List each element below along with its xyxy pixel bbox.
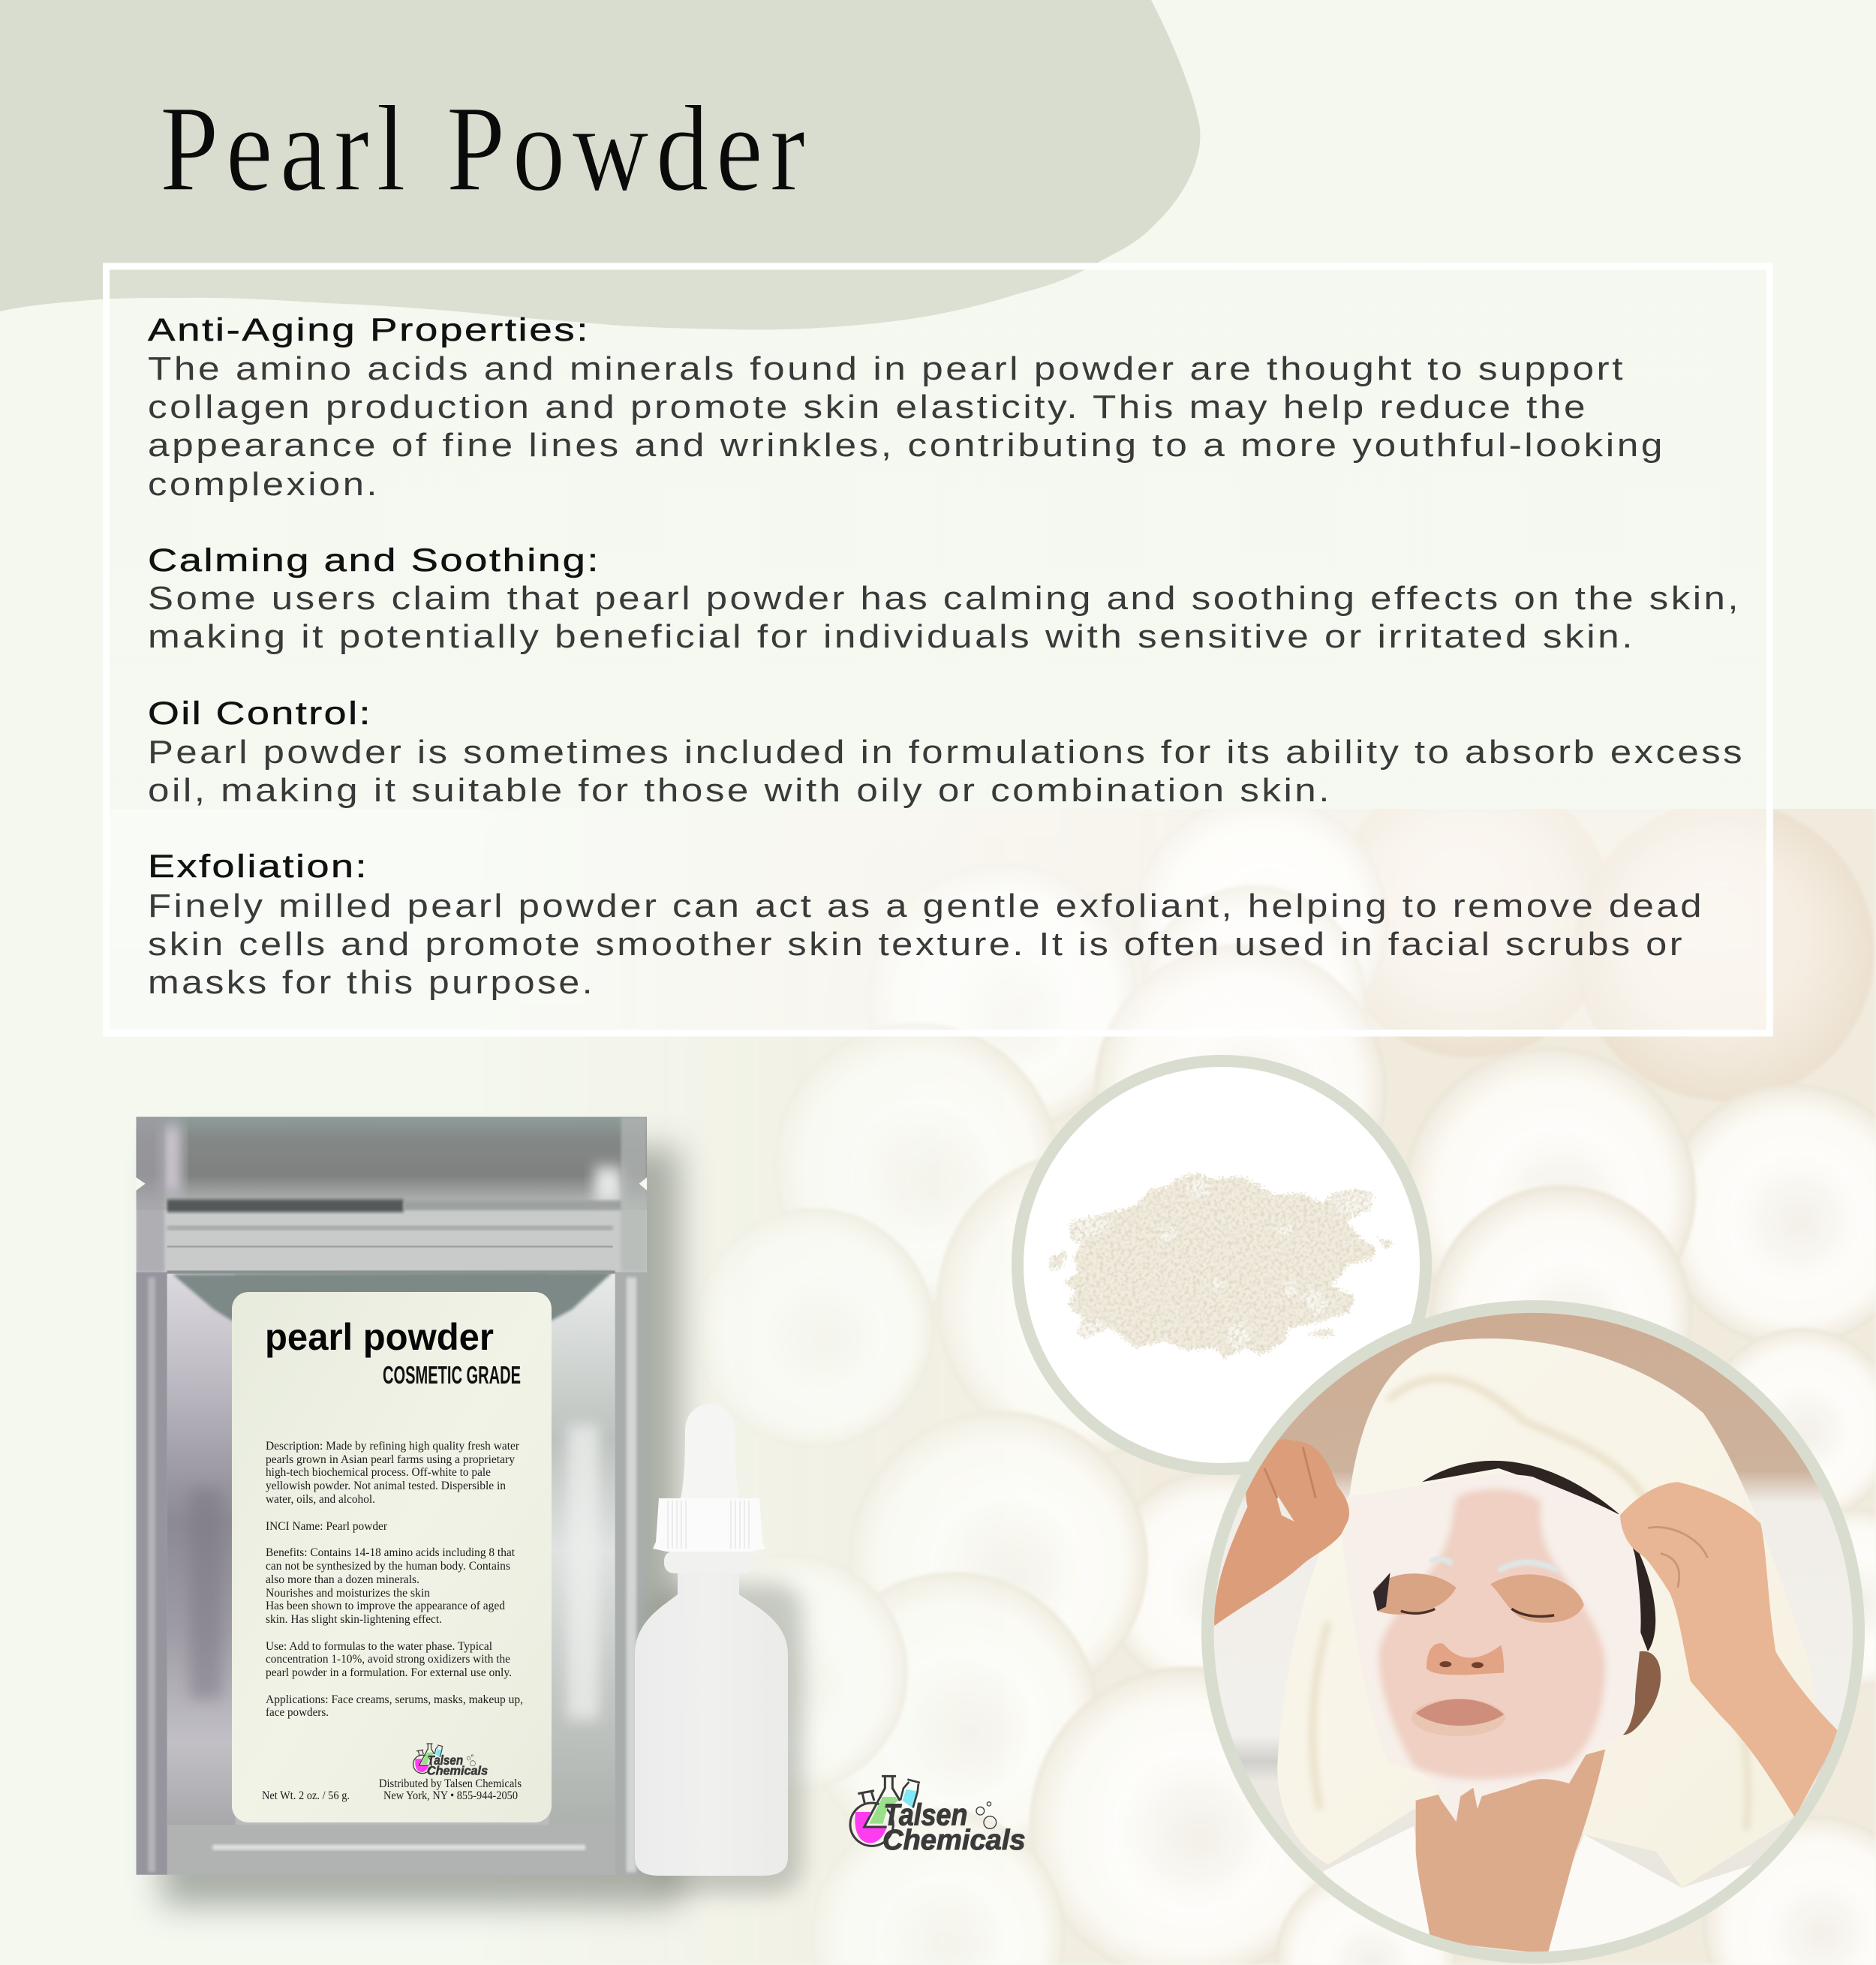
dropper bulb — [681, 1404, 739, 1498]
nose — [1427, 1643, 1504, 1675]
Exfoliation section: Finely milled pearl powder can act as a gentle exfoliant, helping to remove dead — [148, 888, 1704, 924]
Calming section: Some users claim that pearl powder has calming and soothing effects on the skin, — [148, 580, 1741, 617]
label description: INCI Name: Pearl powder — [266, 1520, 388, 1533]
Calming section: Calming and Soothing: — [148, 542, 600, 578]
background: pearls photo — [734, 809, 1876, 1965]
photo background — [1201, 1298, 1868, 1960]
corner sheen — [163, 1125, 181, 1193]
label distributor: Distributed by Talsen Chemicals — [379, 1777, 522, 1790]
hair — [1422, 1461, 1655, 1651]
Anti-Aging section: collagen production and promote skin elasticity. This may help reduce the — [148, 389, 1588, 425]
Anti-Aging section — [148, 312, 1665, 503]
label description: Has been shown to improve the appearance of aged — [266, 1600, 505, 1612]
Exfoliation section: Exfoliation: — [148, 849, 368, 885]
label description: also more than a dozen minerals. — [266, 1573, 419, 1586]
Anti-Aging section: complexion. — [148, 466, 380, 503]
sheet mask — [1341, 1474, 1641, 1822]
Exfoliation section — [148, 849, 1704, 1001]
Oil Control section — [148, 696, 1745, 809]
Anti-Aging section: Anti-Aging Properties: — [148, 312, 590, 348]
Exfoliation section: masks for this purpose. — [148, 964, 595, 1001]
label description: Applications: Face creams, serums, masks, makeup up, — [266, 1693, 523, 1706]
label description: Use: Add to formulas to the water phase. Typical — [266, 1640, 493, 1653]
powder circle — [1018, 1061, 1426, 1469]
Anti-Aging section: appearance of fine lines and wrinkles, contributing to a more youthful-looking — [148, 427, 1665, 464]
label small logo: Talsen — [427, 1753, 463, 1768]
brand logo: Talsen — [883, 1798, 967, 1832]
label description: water, oils, and alcohol. — [266, 1493, 375, 1506]
eyes — [1373, 1573, 1457, 1615]
robe — [1286, 1826, 1839, 1960]
side gussets — [137, 1272, 167, 1875]
bottle shadow — [649, 1583, 803, 1894]
Calming section: making it potentially beneficial for individuals with sensitive or irritated skin. — [148, 618, 1635, 655]
label description: concentration 1-10%, avoid strong oxidizers with the — [266, 1653, 510, 1666]
label description: skin. Has slight skin-lightening effect. — [266, 1613, 442, 1626]
label description: pearls grown in Asian pearl farms using a proprietary — [266, 1453, 515, 1466]
brand logo — [850, 1776, 1026, 1856]
Oil Control section: Pearl powder is sometimes included in formulations for its ability to absorb excess — [148, 734, 1745, 771]
pouch body — [137, 1117, 647, 1875]
label title: pearl powder — [265, 1316, 494, 1358]
label description — [266, 1440, 523, 1719]
label subtitle: COSMETIC GRADE — [383, 1361, 521, 1389]
pouch shadow — [161, 1148, 679, 1906]
label description: Benefits: Contains 14-18 amino acids including 8 that — [266, 1546, 516, 1559]
inner panel — [167, 1273, 615, 1826]
label description: pearl powder in a formulation. For external use only. — [266, 1666, 512, 1679]
title blob — [0, 0, 1200, 330]
label description: Description: Made by refining high quality fresh water — [266, 1440, 520, 1453]
label small logo: Chemicals — [427, 1765, 488, 1778]
label description: face powders. — [266, 1706, 329, 1719]
brand logo: Chemicals — [882, 1824, 1026, 1856]
face mask photo circle — [1201, 1298, 1868, 1963]
bottle body — [635, 1570, 788, 1876]
left hand — [1214, 1439, 1349, 1626]
label description: high-tech biochemical process. Off-white to pale — [266, 1466, 491, 1479]
powder pile — [1049, 1173, 1394, 1358]
label distributor: New York, NY • 855-944-2050 — [383, 1789, 518, 1802]
right hand — [1620, 1482, 1839, 1817]
label small logo — [413, 1744, 488, 1778]
label distributor — [379, 1777, 522, 1802]
Oil Control section: oil, making it suitable for those with oily or combination skin. — [148, 772, 1332, 809]
Oil Control section: Oil Control: — [148, 696, 372, 732]
bottle neck — [664, 1551, 753, 1573]
bottle cap — [653, 1498, 765, 1552]
label description: yellowish powder. Not animal tested. Dispersible in — [266, 1480, 506, 1492]
pouch label — [232, 1292, 552, 1822]
product pouch — [137, 1117, 679, 1906]
title: Pearl Powder — [160, 81, 805, 217]
panel: benefits text — [107, 266, 1769, 1033]
towel — [1277, 1339, 1816, 1888]
ear — [1620, 1651, 1661, 1735]
neck — [1416, 1750, 1605, 1954]
mouth — [1412, 1699, 1505, 1736]
seal band — [137, 1210, 647, 1272]
bottom band — [167, 1825, 615, 1875]
Calming section — [148, 542, 1741, 655]
label description: can not be synthesized by the human body. Contains — [266, 1560, 510, 1573]
mask tint — [1379, 1489, 1605, 1780]
label net weight: Net Wt. 2 oz. / 56 g. — [262, 1789, 350, 1802]
Exfoliation section: skin cells and promote smoother skin texture. It is often used in facial scrubs or — [148, 926, 1685, 963]
label description: Nourishes and moisturizes the skin — [266, 1587, 430, 1600]
dropper bottle — [635, 1404, 803, 1894]
Anti-Aging section: The amino acids and minerals found in pearl powder are thought to support — [148, 350, 1625, 387]
